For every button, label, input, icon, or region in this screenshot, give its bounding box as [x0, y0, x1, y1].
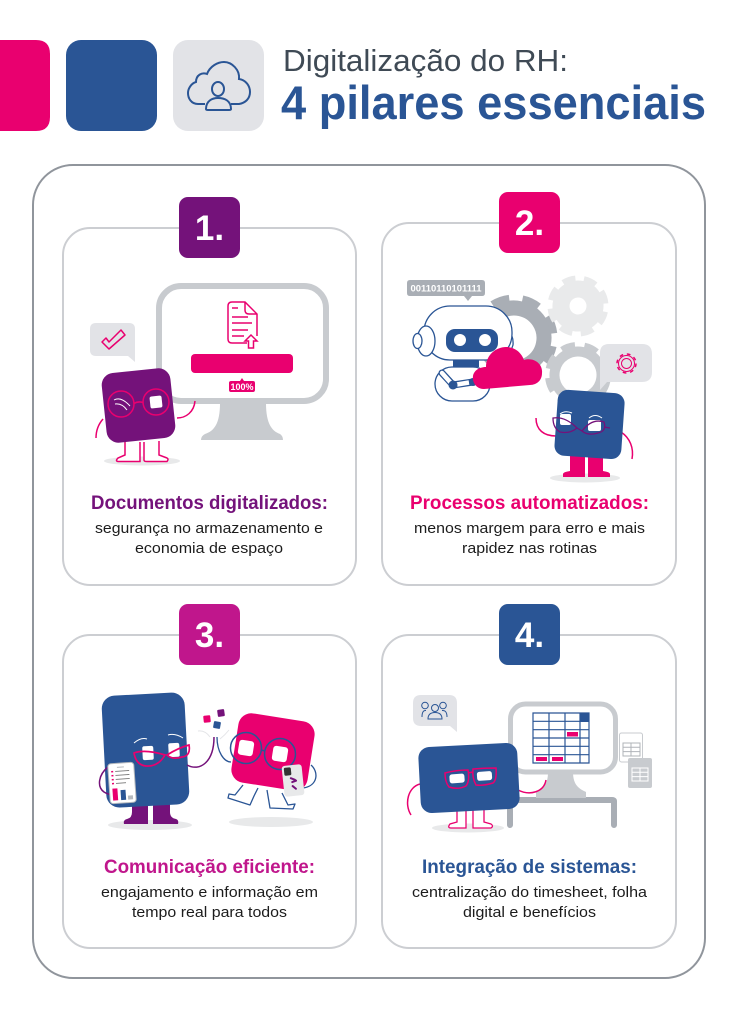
description — [95, 520, 323, 557]
description: menos margem para erro e mais — [414, 520, 645, 537]
binary label: 00110110101111 — [410, 284, 482, 294]
description: digital e benefícios — [463, 904, 596, 921]
heading: Integração de sistemas: — [422, 857, 637, 878]
gears — [467, 273, 614, 411]
character: blue — [536, 389, 633, 482]
phone — [281, 764, 305, 797]
progress bar — [191, 354, 293, 373]
heading: Processos automatizados: — [410, 493, 649, 514]
badge 3 — [179, 604, 240, 665]
description: tempo real para todos — [132, 904, 287, 921]
confetti — [198, 709, 229, 739]
description: rapidez nas rotinas — [462, 540, 597, 557]
pink header square — [0, 40, 50, 131]
description: engajamento e informação em — [101, 884, 318, 901]
icon: pink cloud — [473, 347, 542, 389]
description — [101, 884, 318, 921]
heading: Comunicação eficiente: — [104, 857, 315, 878]
badge 2 — [499, 192, 560, 253]
character: tall blue — [99, 692, 214, 830]
description — [414, 520, 645, 557]
panel: processos automatizados — [382, 192, 676, 585]
badge 3: 3. — [195, 616, 224, 655]
desk and monitor — [510, 704, 616, 825]
documents — [620, 733, 652, 788]
panel: documentos digitalizados — [63, 197, 356, 585]
speech bubble: gear — [600, 344, 652, 390]
title: 4 pilares essenciais — [281, 76, 706, 129]
title: Digitalização do RH: — [283, 43, 568, 78]
tablet — [108, 762, 136, 804]
header — [0, 40, 706, 131]
spreadsheet — [533, 713, 589, 763]
illustration: monitor with upload — [159, 286, 326, 440]
icon: cloud user — [173, 40, 264, 131]
badge 4: 4. — [515, 616, 544, 655]
character: purple — [96, 367, 195, 466]
panel: integracao de sistemas — [382, 604, 676, 948]
robot — [413, 306, 513, 401]
badge 1 — [179, 197, 240, 258]
badge 1: 1. — [195, 209, 224, 248]
description — [412, 884, 648, 921]
heading: Documentos digitalizados: — [91, 493, 328, 514]
description: segurança no armazenamento e — [95, 520, 323, 537]
progress label: 100% — [230, 382, 254, 392]
badge 2: 2. — [515, 204, 544, 243]
speech bubble: people — [413, 695, 457, 732]
outer frame — [33, 165, 705, 978]
icon: document upload — [228, 302, 257, 348]
character: pink — [217, 711, 317, 827]
description: economia de espaço — [135, 540, 283, 557]
badge 4 — [499, 604, 560, 665]
title — [281, 43, 706, 129]
blue header square — [66, 40, 157, 131]
progress label — [229, 378, 255, 392]
description: centralização do timesheet, folha — [412, 884, 648, 901]
panel: comunicacao eficiente — [63, 604, 356, 948]
speech bubble: check — [90, 323, 135, 362]
binary label — [407, 280, 485, 301]
character: wide blue — [408, 742, 546, 832]
